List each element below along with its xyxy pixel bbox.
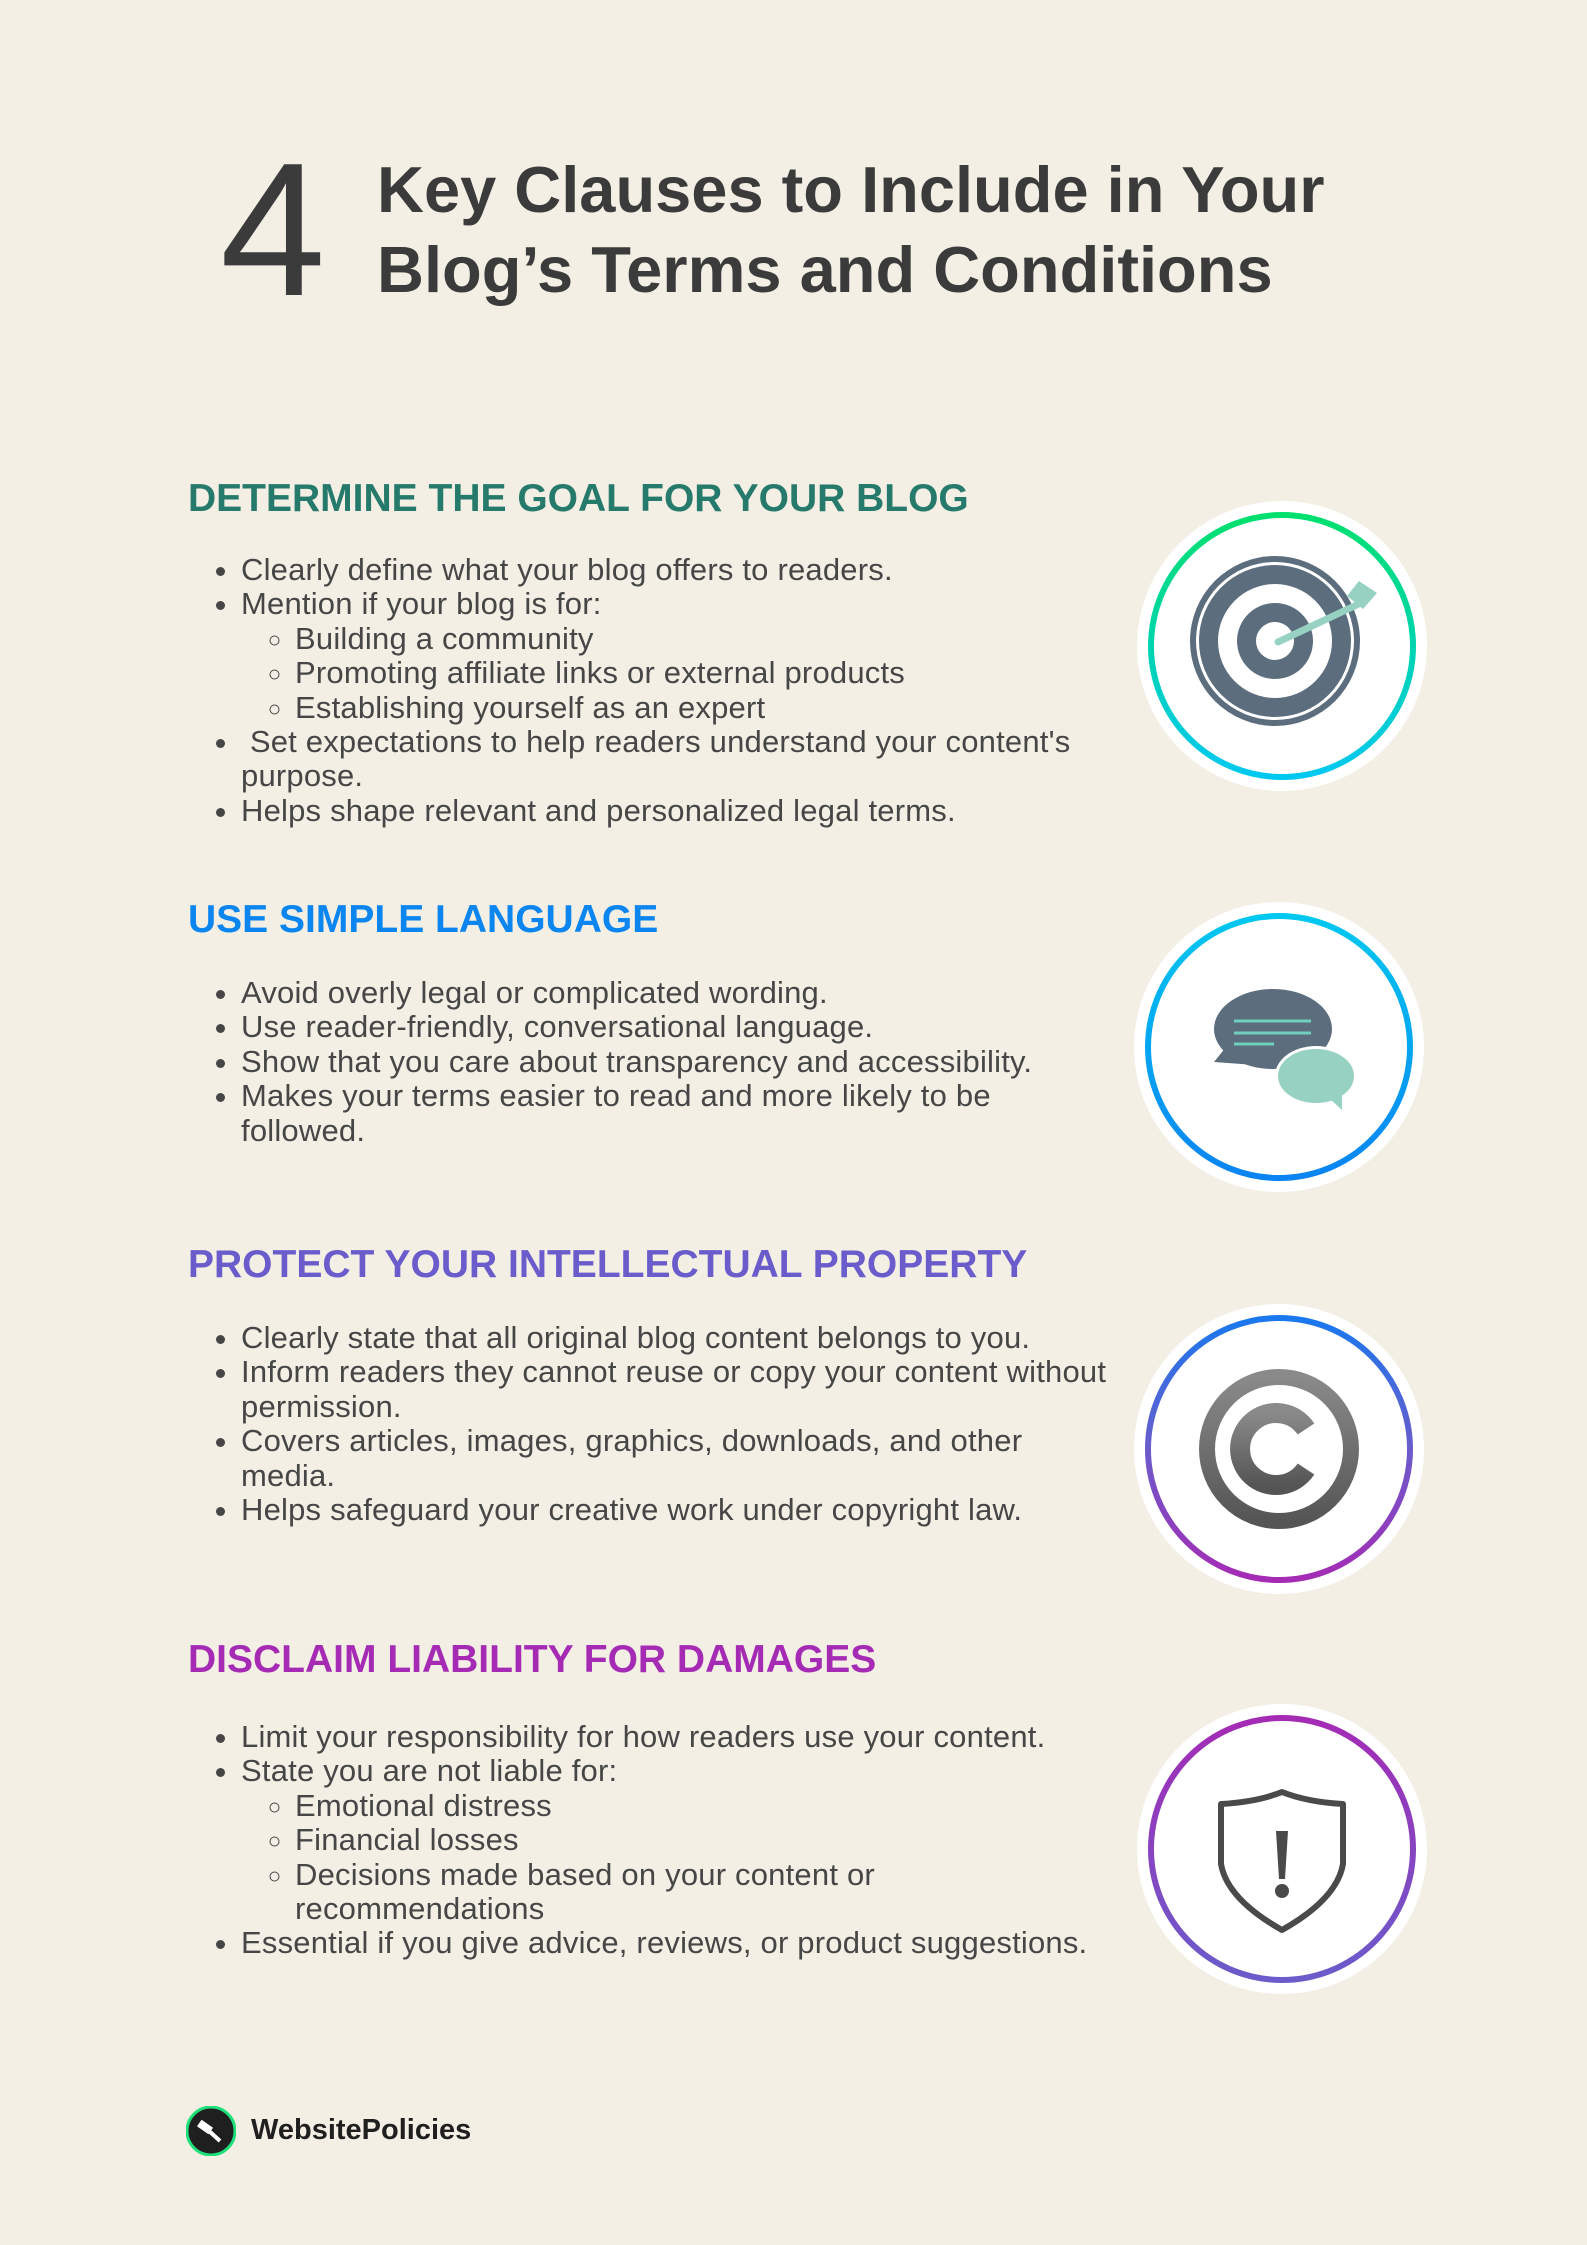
text block: IP bullets: Covers articles, images, graphics, downloads, and other media.	[241, 1423, 1022, 1493]
text block: liability bullets	[216, 1719, 1087, 1960]
text block: liability bullets: Financial losses	[295, 1822, 519, 1857]
text block: liability bullets: Limit your responsibility for how readers use your content.	[241, 1719, 1045, 1754]
heading: determine goal: DETERMINE THE GOAL FOR YOUR BLOG	[188, 477, 969, 520]
text block: goal bullets: Mention if your blog is for:	[241, 586, 602, 621]
text block: goal bullets: Helps shape relevant and personalized legal terms.	[241, 793, 956, 828]
text block: language bullets	[216, 975, 1032, 1148]
text block: goal bullets: Promoting affiliate links or external products	[295, 655, 905, 690]
text block: liability bullets: Essential if you give advice, reviews, or product suggestions.	[241, 1925, 1087, 1960]
title number: 4	[220, 124, 326, 336]
text block: goal bullets: Building a community	[295, 621, 594, 656]
text block: language bullets: Use reader-friendly, conversational language.	[241, 1009, 873, 1044]
text block: IP bullets	[216, 1320, 1106, 1527]
text block: language bullets: Avoid overly legal or complicated wording.	[241, 975, 828, 1010]
icon: shield	[1137, 1704, 1427, 1994]
title text: Blog’s Terms and Conditions	[377, 233, 1273, 306]
icon: copyright	[1134, 1304, 1424, 1594]
text block: liability bullets: Decisions made based on your content or recommendations	[295, 1857, 875, 1926]
brand name: WebsitePolicies	[251, 2114, 471, 2146]
heading: simple language: USE SIMPLE LANGUAGE	[188, 898, 658, 941]
text block: IP bullets: Clearly state that all original blog content belongs to you.	[241, 1320, 1030, 1355]
footer logo	[186, 2106, 471, 2156]
icon: target	[1137, 501, 1427, 791]
heading: disclaim liability: DISCLAIM LIABILITY FOR DAMAGES	[188, 1638, 876, 1681]
title text: Key Clauses to Include in Your	[377, 153, 1325, 226]
icon: gavel	[186, 2106, 236, 2156]
title text	[377, 153, 1325, 306]
icon: chat bubbles	[1134, 902, 1424, 1192]
title	[220, 124, 1325, 336]
text block: goal bullets	[216, 552, 1070, 828]
text block: goal bullets: Clearly define what your blog offers to readers.	[241, 552, 893, 587]
text block: language bullets: Show that you care about transparency and accessibility.	[241, 1044, 1032, 1079]
text block: IP bullets: Helps safeguard your creative work under copyright law.	[241, 1492, 1022, 1527]
text block: language bullets: Makes your terms easier to read and more likely to be followed.	[241, 1078, 991, 1148]
text block: IP bullets: Inform readers they cannot reuse or copy your content without permission.	[241, 1354, 1106, 1424]
text block: goal bullets: Establishing yourself as an expert	[295, 690, 765, 725]
text block: goal bullets: Set expectations to help readers understand your content's purpose.	[241, 724, 1070, 793]
heading: intellectual property: PROTECT YOUR INTELLECTUAL PROPERTY	[188, 1243, 1027, 1286]
text block: liability bullets: State you are not liable for:	[241, 1753, 617, 1788]
text block: liability bullets: Emotional distress	[295, 1788, 552, 1823]
